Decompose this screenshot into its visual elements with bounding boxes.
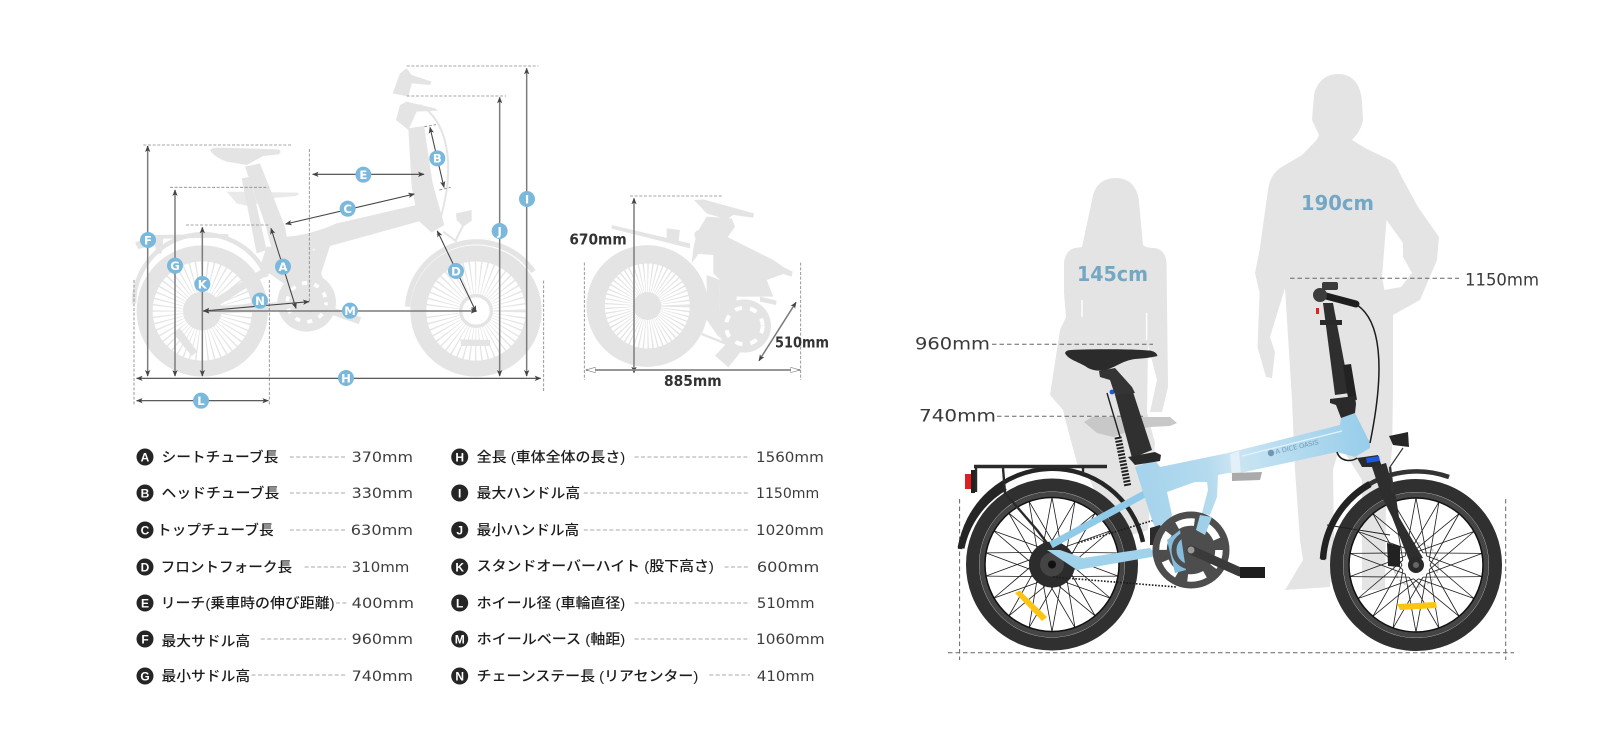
folded dimension lines bbox=[584, 196, 801, 380]
bike dimension callouts: 1150mm bbox=[1465, 270, 1539, 290]
height label 145cm: 145cm bbox=[1077, 262, 1148, 286]
specification table bbox=[136, 448, 825, 685]
row K: 600mm bbox=[757, 560, 819, 576]
front fender bbox=[1323, 471, 1449, 560]
letter badges: K bbox=[198, 277, 208, 291]
row D: D bbox=[141, 560, 150, 574]
row I: I bbox=[458, 486, 461, 500]
row F: 最大サドル高 bbox=[162, 633, 250, 649]
row I: 最大ハンドル高 bbox=[477, 485, 580, 501]
row I: 1150mm bbox=[756, 486, 819, 502]
bike dimension callouts: 960mm bbox=[915, 334, 990, 354]
rear reflector bbox=[1015, 590, 1047, 621]
bike geometry diagram bbox=[134, 66, 544, 409]
grey bike silhouette, side view bbox=[134, 68, 534, 369]
row J bbox=[451, 522, 824, 539]
silhouette: man 190cm bbox=[1255, 74, 1439, 590]
row M bbox=[451, 630, 825, 648]
row D: フロントフォーク長 bbox=[161, 559, 292, 575]
row L: 510mm bbox=[757, 596, 814, 612]
saddle bbox=[1065, 349, 1158, 371]
row G: 最小サドル高 bbox=[162, 668, 250, 684]
folded bike silhouette bbox=[596, 199, 793, 367]
row B: ヘッドチューブ長 bbox=[162, 485, 279, 501]
bike dimension callouts: 740mm bbox=[919, 406, 996, 426]
row A: 370mm bbox=[352, 450, 413, 466]
row L: L bbox=[456, 596, 463, 610]
row C bbox=[136, 522, 413, 539]
row N: チェーンステー長 (リアセンター) bbox=[477, 668, 698, 684]
rear wheel bbox=[961, 474, 1143, 655]
letter badges: B bbox=[433, 152, 442, 166]
row D: 310mm bbox=[352, 560, 409, 576]
row N: 410mm bbox=[757, 669, 814, 685]
folding hinge bbox=[1230, 451, 1262, 481]
letter badges: N bbox=[255, 294, 265, 308]
seat tube bbox=[1115, 392, 1152, 458]
row F bbox=[136, 630, 413, 649]
row C: C bbox=[141, 524, 150, 538]
row B: B bbox=[141, 486, 150, 500]
row E: E bbox=[141, 596, 149, 610]
row A bbox=[136, 448, 413, 466]
letter badges: I bbox=[525, 192, 529, 206]
seat clamp bbox=[1128, 452, 1161, 465]
front wheel bbox=[1325, 474, 1507, 656]
row E bbox=[136, 594, 414, 612]
row H: 1560mm bbox=[756, 450, 824, 466]
letter badges: G bbox=[170, 259, 180, 273]
blue folding e-bike bbox=[960, 282, 1507, 656]
reference dashed lines bbox=[134, 66, 544, 405]
main frame bbox=[1135, 413, 1370, 540]
row L bbox=[451, 594, 814, 612]
spring and shock bbox=[1107, 390, 1128, 487]
folded length label: 885mm bbox=[664, 373, 722, 390]
letter badges: H bbox=[341, 371, 351, 385]
height label 190cm: 190cm bbox=[1301, 191, 1374, 215]
row C: トップチューブ長 bbox=[157, 522, 274, 538]
seat and chain stays bbox=[1047, 491, 1157, 570]
letter badges: M bbox=[344, 304, 356, 318]
row K: K bbox=[455, 560, 464, 574]
dimension arrows bbox=[137, 68, 541, 401]
row C: 630mm bbox=[351, 523, 413, 539]
row E: リーチ(乗車時の伸び距離) bbox=[161, 595, 335, 611]
brake cable bbox=[1337, 305, 1379, 460]
row B bbox=[136, 484, 413, 502]
bike dimension callouts bbox=[915, 270, 1539, 660]
row F: F bbox=[141, 632, 149, 646]
front fork bbox=[1357, 455, 1424, 573]
letter badges: D bbox=[451, 264, 461, 278]
row A: A bbox=[141, 450, 150, 464]
row N bbox=[451, 668, 814, 685]
folded width label: 510mm bbox=[775, 334, 829, 351]
row F: 960mm bbox=[352, 632, 413, 648]
top tube highlight bbox=[1242, 431, 1342, 456]
row J: 最小ハンドル高 bbox=[477, 522, 579, 538]
row H: H bbox=[455, 450, 464, 464]
rack and tail light bbox=[965, 466, 1107, 547]
row I bbox=[451, 484, 819, 502]
rear fender bbox=[960, 469, 1143, 549]
folded bike diagram bbox=[569, 196, 829, 390]
row L: ホイール径 (車輪直径) bbox=[477, 595, 625, 611]
headlight bbox=[1389, 432, 1409, 467]
row G bbox=[136, 668, 413, 685]
row E: 400mm bbox=[352, 596, 414, 612]
row N: N bbox=[455, 670, 464, 684]
front reflector bbox=[1397, 602, 1437, 610]
letter badges: C bbox=[343, 202, 352, 216]
folded height label: 670mm bbox=[569, 231, 627, 248]
row M: ホイールベース (軸距) bbox=[477, 631, 625, 647]
chainring and crank bbox=[1150, 512, 1265, 588]
row H: 全長 (車体全体の長さ) bbox=[477, 449, 625, 465]
logo on top tube: A DICE OASIS bbox=[1275, 438, 1319, 456]
ghost lowered saddle bbox=[1084, 417, 1177, 437]
row A: シートチューブ長 bbox=[162, 449, 278, 465]
letter badges: E bbox=[359, 168, 367, 182]
row J: 1020mm bbox=[756, 523, 824, 539]
row M: M bbox=[455, 632, 465, 646]
row H bbox=[451, 448, 824, 466]
row J: J bbox=[456, 524, 463, 538]
letter badges: F bbox=[144, 233, 152, 247]
handlebar and display bbox=[1313, 282, 1356, 314]
row D bbox=[136, 558, 409, 576]
row M: 1060mm bbox=[756, 632, 825, 648]
seat post bbox=[1099, 368, 1135, 395]
silhouette: woman 145cm bbox=[1050, 178, 1168, 540]
row K bbox=[451, 558, 819, 576]
letter badges: J bbox=[496, 224, 502, 238]
chain bbox=[1053, 518, 1176, 587]
letter badges: A bbox=[278, 260, 288, 274]
row G: G bbox=[140, 670, 150, 684]
letter badges bbox=[140, 150, 535, 409]
handlebar stem bbox=[1320, 303, 1357, 418]
row G: 740mm bbox=[352, 669, 413, 685]
row K: スタンドオーバーハイト (股下高さ) bbox=[477, 558, 714, 574]
row B: 330mm bbox=[352, 486, 413, 502]
letter badges: L bbox=[197, 394, 205, 408]
